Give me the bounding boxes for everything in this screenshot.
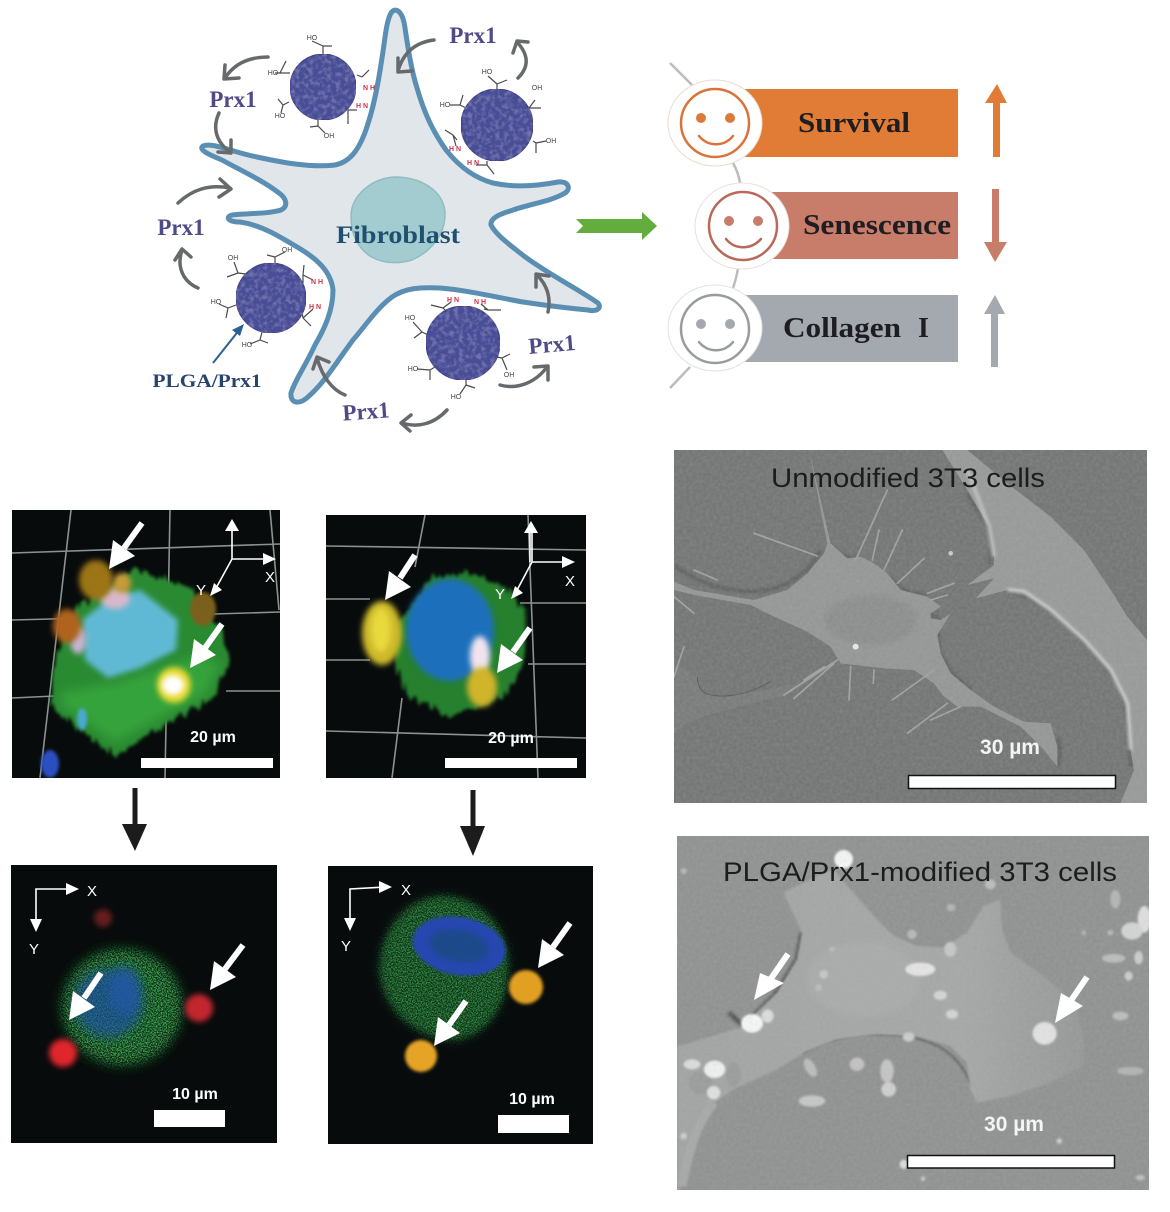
scale bar 20 µm [445,730,577,768]
scale bar 20 µm: 20 µm [488,730,534,747]
nanoparticle lower left: HO [211,299,222,306]
Prx1 labels [157,23,577,426]
nanoparticle lower right: HO [408,366,419,373]
scale bar 10 µm [154,1086,225,1127]
nanoparticle lower left [211,247,323,349]
row: Collagen I [668,285,1005,371]
axes: X [265,569,275,586]
pointer arrows [754,954,1087,1023]
confocal 3D panel A [12,510,280,778]
nanoparticle top right: OH [546,138,556,145]
nanoparticle top right: H N [449,146,461,153]
nanoparticle top right: HO [440,102,451,109]
surface specks [853,644,859,650]
Prx1 labels: Prx1 [527,330,577,359]
pointer arrows [385,555,530,673]
central cell [674,450,1057,767]
scale bar 30 µm [908,1113,1114,1168]
schematic: fibroblast with PLGA/Prx1 particles [152,10,599,431]
axes [196,519,276,599]
scale bar 20 µm: 20 µm [190,729,236,746]
heading: PLGA/Prx1-modified 3T3 cells [723,857,1117,887]
Prx1 labels: Prx1 [157,215,205,240]
scale bar 10 µm [498,1091,569,1133]
row: Collagen I: I [918,313,929,344]
nanoparticle lower left: N H [311,279,323,286]
cell: green cytoplasm with blue nucleus [380,896,510,1040]
axes: X [87,883,97,900]
nanoparticle lower right: HO [451,394,462,401]
axes: X [565,573,575,590]
nanoparticle lower left: HO [242,342,253,349]
axes [495,521,575,603]
nanoparticle lower right: N H [474,299,486,306]
row: Senescence [695,183,1007,269]
particles [49,909,213,1067]
Prx1 labels: Prx1 [342,397,390,426]
outcomes panel [668,63,1007,388]
black arrow left [122,788,147,851]
heading: Unmodified 3T3 cells [771,463,1045,493]
pointer arrows [69,945,243,1020]
nanoparticle lower right: OH [504,372,514,379]
nanoparticle top left: H N [356,103,368,110]
row: Survival: Survival [798,108,910,139]
nanoparticle top left: HO [268,70,279,77]
confocal slice panel D [328,866,593,1144]
shadows [674,493,1131,767]
scale bar 10 µm: 10 µm [172,1086,218,1103]
neighbouring cell [942,450,1147,803]
particles [405,970,543,1072]
row: Survival [668,80,1007,166]
green arrow [576,212,657,240]
nanoparticle top left: N H [363,85,375,92]
black arrow right [460,790,485,856]
axes [341,881,411,955]
nanoparticle lower right: H N [447,297,459,304]
particle clumps [680,850,1151,1181]
nanoparticle top right: OH [532,85,542,92]
nanoparticle top right [440,69,556,174]
row: Collagen I: Collagen [783,313,901,344]
axes: Y [341,938,351,955]
nanoparticle lower right [405,297,514,401]
confocal 3D panel B [326,515,586,778]
confocal slice panel C [11,865,277,1143]
nanoparticle top left: HO [275,113,286,120]
nanoparticle lower right: HO [405,315,416,322]
SEM panel: unmodified 3T3 cells [674,450,1147,803]
nanoparticle top left: OH [324,133,334,140]
shadows [729,933,802,1026]
SEM panel: PLGA/Prx1-modified 3T3 cells [677,836,1151,1190]
scale bar 10 µm: 10 µm [509,1091,555,1108]
nucleus [351,177,445,263]
axes: X [401,882,411,899]
nanoparticle top right: HO [482,69,493,76]
filopodia [674,490,961,733]
cell: green cytoplasm with blue nucleus [62,949,182,1065]
nanoparticle lower left: H N [309,304,321,311]
label: Fibroblast: Fibroblast [336,222,461,249]
scale bar 30 µm: 30 µm [984,1113,1044,1136]
connector line [670,63,740,388]
nanoparticle top left: HO [307,35,318,42]
pointer arrows [434,923,570,1046]
Prx1 labels: Prx1 [449,23,497,48]
pointer arrows [109,523,222,668]
row: Senescence: Senescence [803,210,951,241]
nanoparticle lower left: OH [228,255,238,262]
cell body [677,869,1084,1190]
fibroblast cell outline [202,10,599,402]
scale bar 20 µm [141,729,273,768]
scale bar 30 µm [908,736,1116,788]
lower-left membrane [674,663,834,733]
curved arrows: Prx1 release and uptake [175,40,549,431]
Prx1 labels: Prx1 [209,87,257,112]
axes: Y [495,586,505,603]
nanoparticle top left [268,35,375,140]
scale bar 30 µm: 30 µm [980,736,1040,759]
axes: Y [29,941,39,958]
nanoparticle lower left: OH [282,247,292,254]
axes [29,883,97,958]
axes: Y [196,582,206,599]
lower-left strand [682,1103,714,1186]
label: PLGA/Prx1 with pointer: PLGA/Prx1 [152,371,262,392]
label: PLGA/Prx1 with pointer [152,324,262,392]
nanoparticle top right: H N [467,160,479,167]
